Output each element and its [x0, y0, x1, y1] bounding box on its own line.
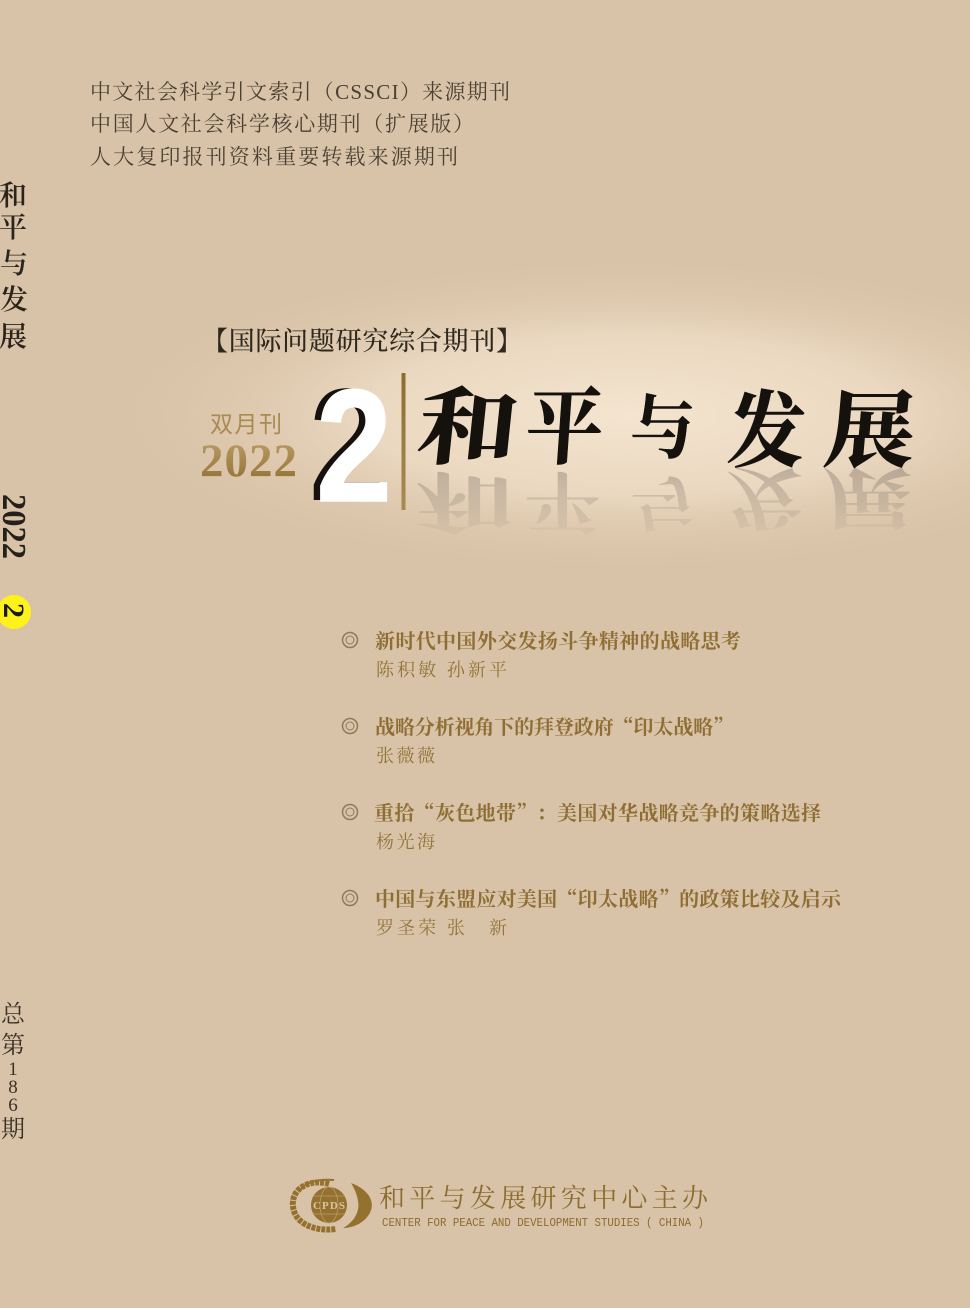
indexing statements: 中国人文社会科学核心期刊（扩展版） — [90, 112, 474, 136]
masthead title: 平 — [523, 383, 606, 476]
publisher logo: CPDS — [313, 1200, 345, 1212]
masthead title: 和 — [413, 383, 524, 476]
masthead reflection: 与 — [630, 469, 696, 533]
publisher name: 和平与发展研究中心主办 — [379, 1184, 709, 1213]
masthead reflection: 展 — [822, 459, 913, 533]
article 2: 战略分析视角下的拜登政府“印太战略” — [375, 711, 733, 740]
spine: journal title — [0, 180, 28, 353]
vertical rule — [402, 373, 406, 510]
article 1: 新时代中国外交发扬斗争精神的战略思考 — [375, 625, 741, 654]
indexing statements: 人大复印报刊资料重要转载来源期刊 — [90, 145, 458, 169]
background glow — [100, 255, 970, 575]
masthead title: 展 — [820, 385, 919, 478]
masthead reflection — [418, 468, 911, 530]
bullet — [342, 632, 358, 648]
masthead reflection: 和 — [415, 463, 516, 538]
spine: cumulative issue number — [1, 1001, 26, 1143]
article 3: 杨光海 — [376, 831, 435, 852]
article 1: 陈积敏 孙新平 — [376, 660, 507, 680]
article 2 — [342, 711, 733, 766]
masthead title: 与 — [630, 391, 696, 467]
article 2: 张薇薇 — [376, 746, 435, 766]
publisher english name: CENTER FOR PEACE AND DEVELOPMENT STUDIES ( CHINA ) — [382, 1216, 704, 1230]
article 4: 中国与东盟应对美国“印太战略”的政策比较及启示 — [375, 883, 843, 912]
spine: cumulative issue number: 总 — [1, 1001, 26, 1028]
spine: cumulative issue number: 第 — [1, 1032, 25, 1059]
spine: journal title: 与 — [0, 248, 28, 280]
spine: cumulative issue number: 6 — [8, 1095, 18, 1116]
article 3 — [342, 797, 821, 852]
spine: cumulative issue number: 期 — [1, 1116, 25, 1143]
article 3: 重拾“灰色地带”：美国对华战略竞争的策略选择 — [374, 797, 821, 826]
spine: cumulative issue number: 8 — [8, 1077, 18, 1098]
article 4: 罗圣荣 张 新 — [376, 918, 507, 938]
indexing statements: 中文社会科学引文索引（CSSCI）来源期刊 — [90, 80, 510, 104]
globe — [311, 1187, 347, 1223]
wreath — [293, 1180, 336, 1230]
publisher logo — [293, 1180, 372, 1230]
masthead title — [413, 383, 919, 479]
masthead title: 发 — [725, 386, 808, 479]
spine: journal title: 发 — [0, 284, 28, 316]
article 4 — [342, 883, 843, 938]
issue number: 2 — [316, 356, 392, 535]
masthead reflection: 发 — [726, 459, 803, 534]
spine: cumulative issue number: 1 — [8, 1059, 18, 1080]
indexing statements — [90, 80, 510, 169]
issue number: 2 — [309, 355, 385, 534]
bullet — [342, 718, 358, 734]
year: 2022 — [200, 435, 297, 487]
article 1 — [342, 625, 741, 680]
bullet — [342, 890, 358, 906]
journal category: 【国际问题研究综合期刊】 — [202, 327, 522, 356]
frequency label: 双月刊 — [210, 411, 282, 437]
bullet — [342, 804, 358, 820]
masthead reflection: 平 — [524, 463, 601, 538]
spine: issue badge — [0, 595, 31, 629]
